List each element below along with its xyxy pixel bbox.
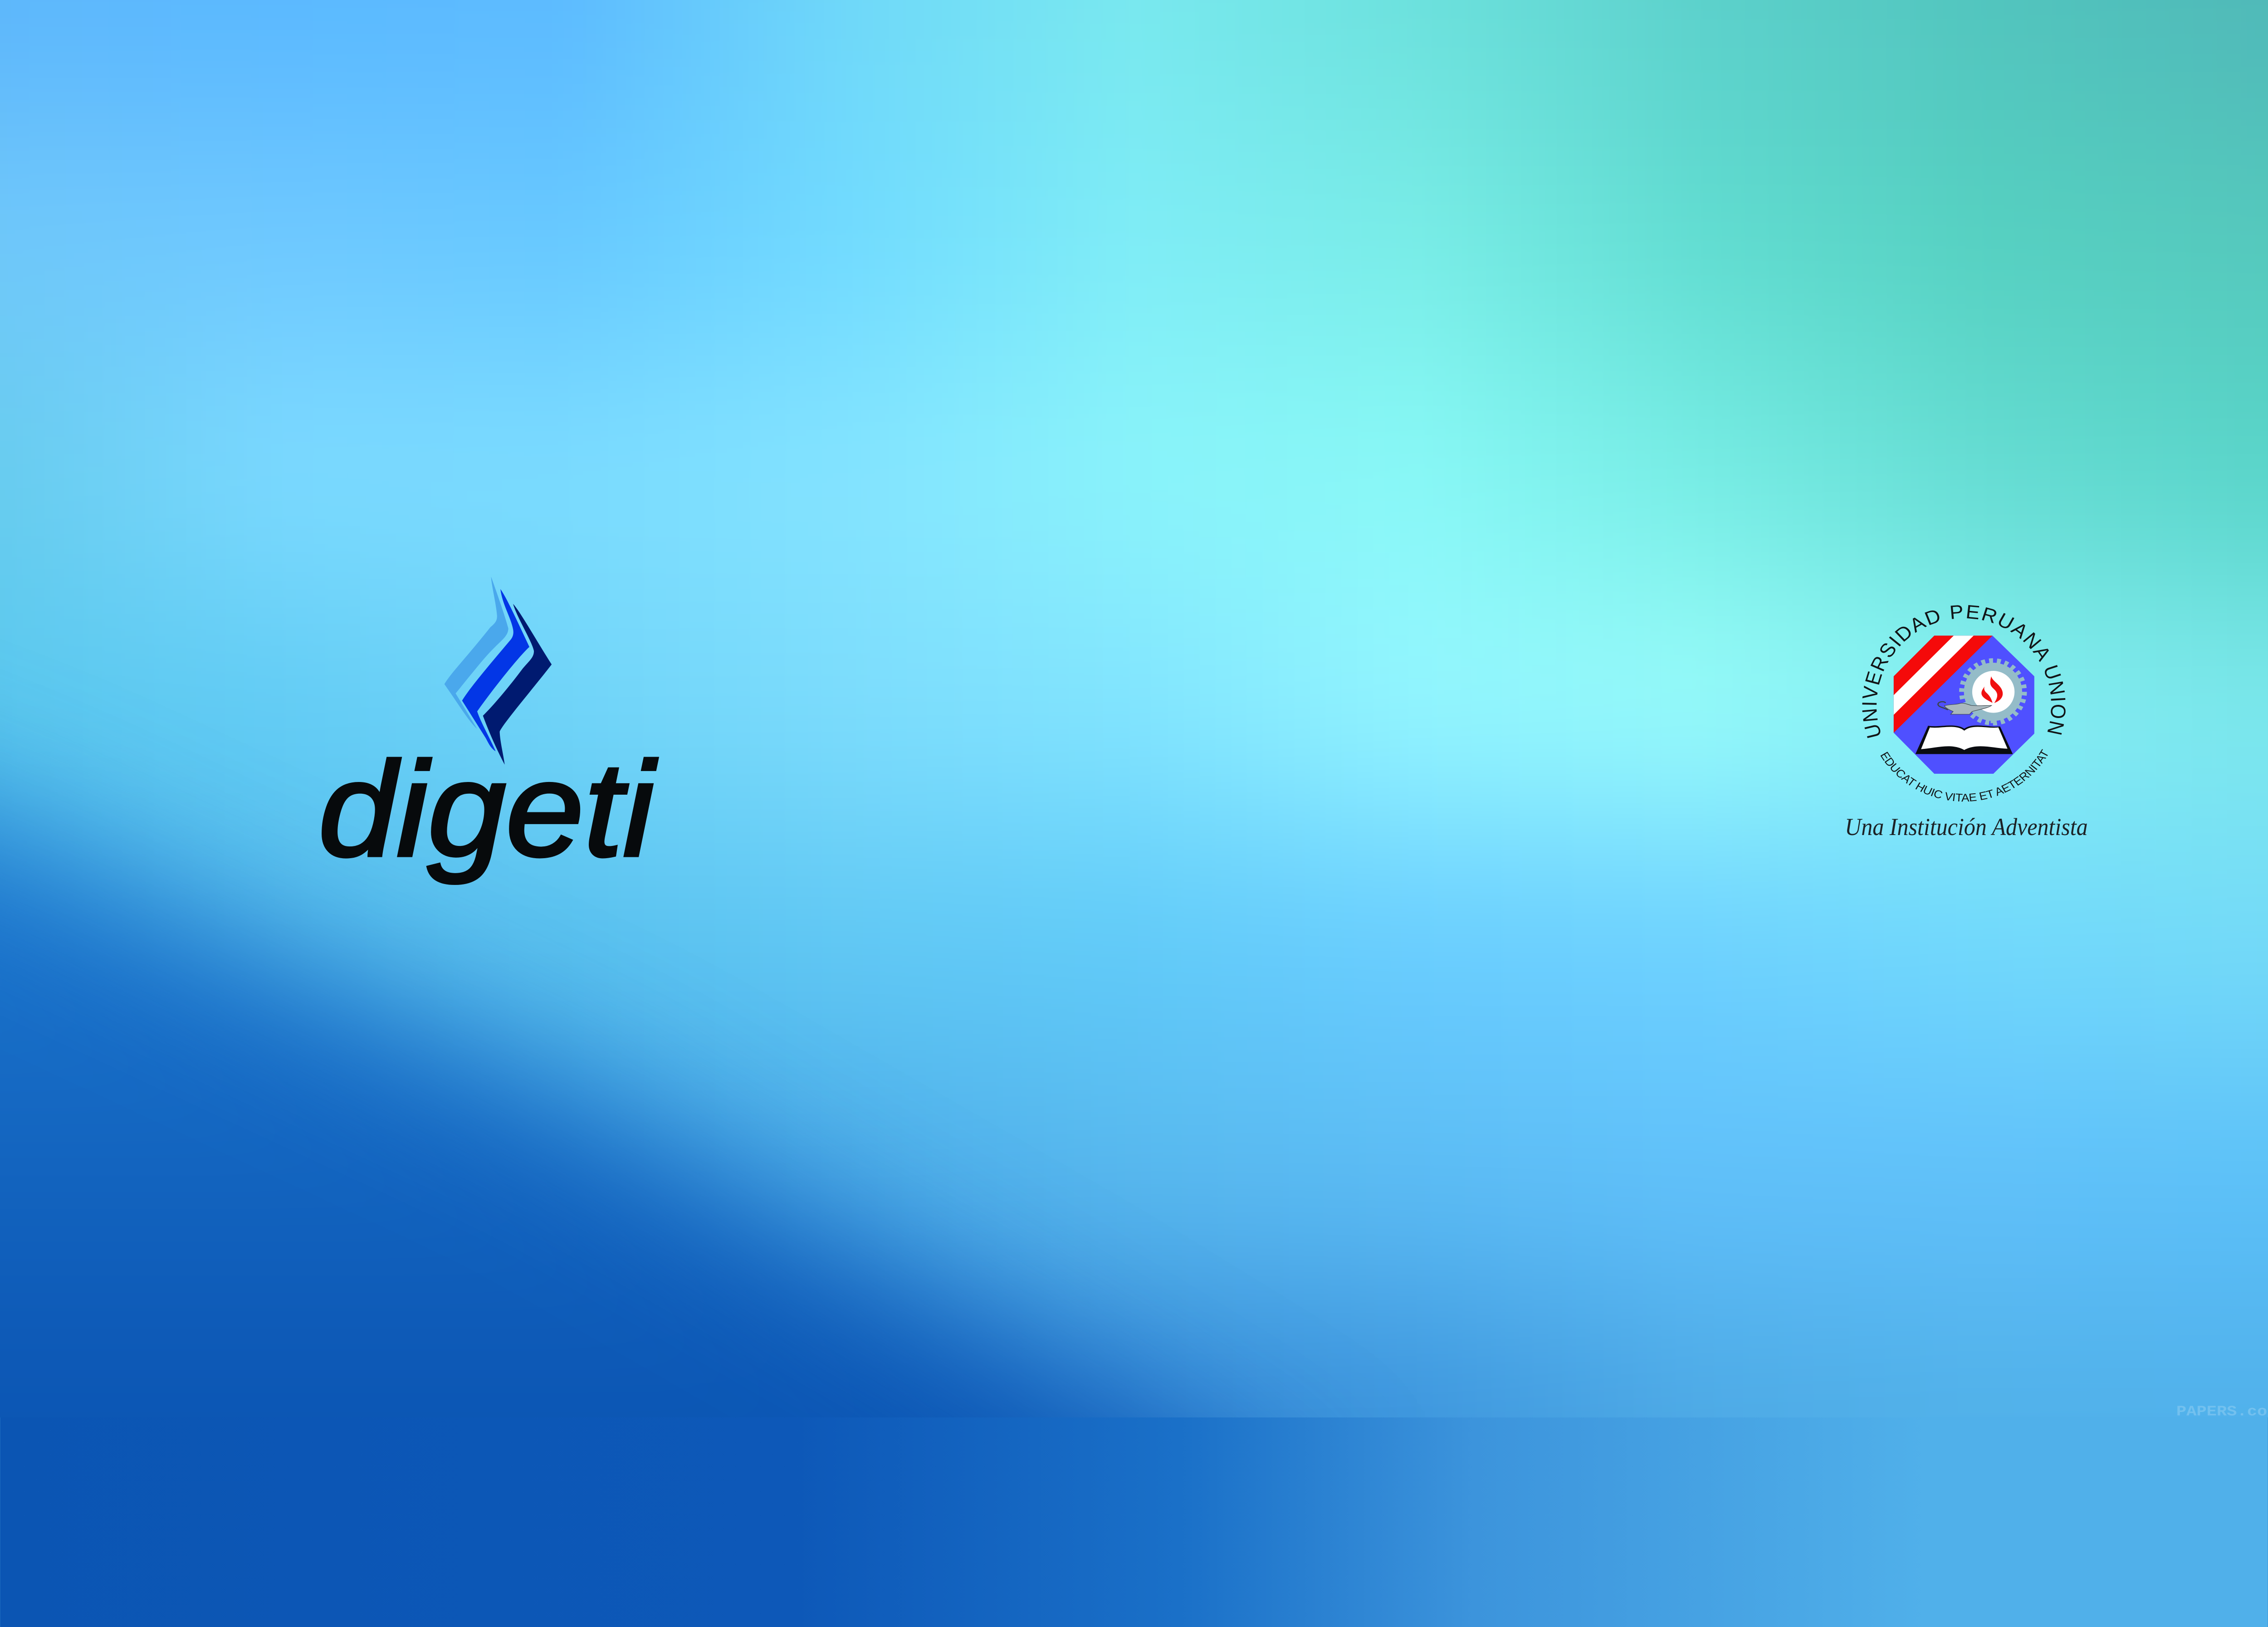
seal octagon shield	[1894, 635, 2034, 774]
seal ring text: university name: UNIVERSIDAD PERUANA UNION	[1858, 601, 2070, 740]
logo: Universidad Peruana Union seal	[1824, 583, 2088, 841]
icon: oil lamp	[1938, 702, 1992, 714]
icon: digeti three-layer diamond mark	[445, 577, 552, 765]
logo: digeti	[318, 577, 658, 885]
icon: gear with flame	[1962, 660, 2024, 723]
icon: open book	[1916, 725, 2013, 754]
red and white diagonal stripes	[1894, 635, 1993, 733]
wordmark: digeti: digeti	[318, 734, 658, 885]
tagline: Una Institución Adventista: Una Institución Adventista	[1845, 814, 2088, 841]
seal motto text: EDUCAT HUIC VITAE ET AETERNITATI	[1824, 583, 2052, 804]
